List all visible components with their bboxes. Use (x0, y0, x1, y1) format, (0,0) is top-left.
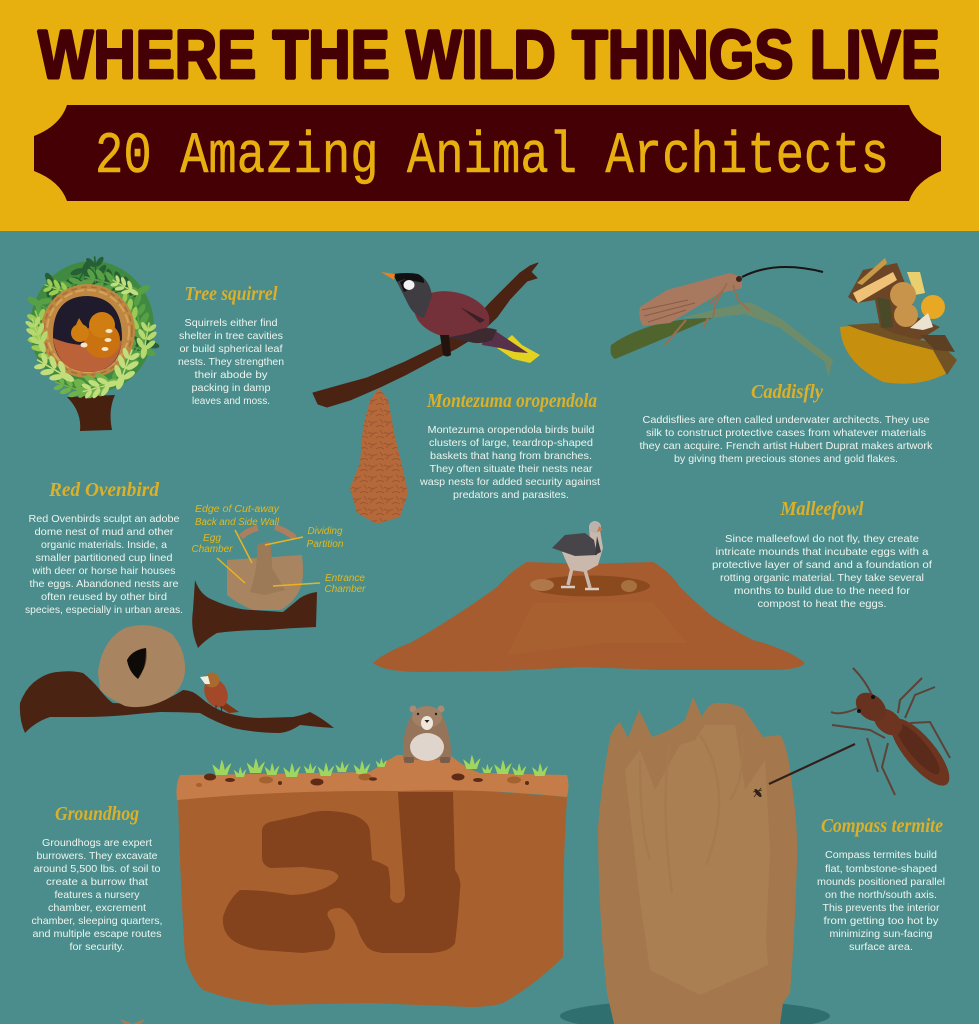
icon: malleefowl bird (552, 521, 603, 589)
text: groundhog: create a burrow that (46, 876, 148, 888)
heading: compass termite: Compass termite (821, 815, 943, 837)
panel: malleefowl (373, 498, 932, 672)
text: compass termite (817, 849, 945, 953)
labels: Chamber (192, 544, 233, 555)
heading: montezuma oropendola: Montezuma oropendola (426, 390, 597, 412)
text: caddisfly: they can acquire. French artist Hubert Duprat makes artwork (640, 440, 933, 452)
text: montezuma oropendola: baskets that hang from branches. (430, 450, 592, 462)
next section hint (121, 1020, 144, 1024)
text: red ovenbird: species, especially in urban areas. (25, 604, 183, 616)
text: groundhog: chamber, excrement (48, 902, 146, 914)
icon: leaf nest with squirrel (21, 254, 161, 431)
text: malleefowl: Since malleefowl do not fly, they create (725, 533, 919, 545)
text: montezuma oropendola: Montezuma oropendola birds build (428, 424, 595, 436)
text: groundhog: features a nursery (54, 889, 140, 901)
text: tree squirrel: or build spherical leaf (180, 343, 283, 355)
illustration: mound (373, 521, 805, 672)
text: red ovenbird: smaller partitioned cup lined (36, 552, 173, 564)
text: compass termite: mounds positioned parallel (817, 876, 945, 888)
panel: red ovenbird (20, 479, 366, 733)
text: tree squirrel: leaves and moss. (192, 395, 270, 407)
text: caddisfly: Caddisflies are often called underwater architects. They use (642, 414, 930, 426)
text: red ovenbird: the eggs. Abandoned nests are (30, 578, 179, 590)
text: tree squirrel (178, 317, 284, 407)
text: groundhog: for security. (70, 941, 124, 953)
illustration: termite mound (598, 697, 855, 1024)
text: montezuma oropendola: predators and parasites. (453, 489, 569, 501)
text: montezuma oropendola: wasp nests for added security against (419, 476, 600, 488)
text: groundhog: Groundhogs are expert (42, 837, 152, 849)
text: compass termite: on the north/south axis. (825, 889, 937, 901)
text: compass termite: Compass termites build (825, 849, 937, 861)
text: red ovenbird: organic materials. Inside, a (41, 539, 167, 551)
text: tree squirrel: nests. They strengthen (178, 356, 284, 368)
text: red ovenbird (25, 513, 183, 616)
labels: Partition (306, 539, 344, 550)
icon: caddisfly case (840, 258, 957, 384)
text: red ovenbird: Red Ovenbirds sculpt an adobe (28, 513, 180, 525)
diagram: cut-away nest (192, 504, 366, 648)
text: caddisfly (640, 414, 933, 465)
text: malleefowl: compost to heat the eggs. (758, 598, 886, 610)
heading: caddisfly: Caddisfly (751, 381, 823, 403)
text: montezuma oropendola (419, 424, 600, 501)
text: tree squirrel: Squirrels either find (184, 317, 278, 329)
labels: Entrance (325, 573, 365, 584)
text: red ovenbird: with deer or horse hair houses (31, 565, 176, 577)
text: tree squirrel: their abode by (194, 369, 268, 381)
subtitle banner (34, 105, 941, 201)
icon: red ovenbird (200, 672, 239, 714)
text: tree squirrel: packing in damp (192, 382, 271, 394)
text: compass termite: from getting too hot by (824, 915, 939, 927)
text: tree squirrel: shelter in tree cavities (179, 330, 283, 342)
labels: Edge of Cut-away (195, 504, 280, 515)
labels: Back and Side Wall (195, 517, 280, 528)
icon: caddisfly on leaf (610, 267, 833, 377)
heading: groundhog: Groundhog (55, 803, 139, 825)
text: compass termite: flat, tombstone-shaped (825, 863, 937, 875)
illustration: dome nest on branch (20, 625, 334, 733)
text: red ovenbird: often reused by other bird (41, 591, 167, 603)
basket nest (350, 388, 408, 524)
mound shadow (560, 1000, 830, 1024)
panel: caddisfly (610, 258, 957, 465)
icon: compass termite (831, 668, 958, 795)
labels (192, 504, 366, 595)
labels: Egg (203, 533, 221, 544)
text: malleefowl: intricate mounds that incubate eggs with a (716, 546, 929, 558)
branch (313, 263, 538, 407)
text: malleefowl: months to build due to the need for (734, 585, 911, 597)
text: red ovenbird: dome nest of mud and other (34, 526, 174, 538)
panel: tree squirrel (21, 254, 284, 431)
text: groundhog: chamber, sleeping quarters, (32, 915, 162, 927)
header band (0, 0, 979, 231)
small termite and pointer (753, 744, 855, 798)
text: groundhog: burrowers. They excavate (36, 850, 158, 862)
labels: Dividing (308, 526, 343, 537)
heading: red ovenbird: Red Ovenbird (48, 479, 160, 501)
grass (212, 755, 548, 777)
panel: groundhog (32, 706, 568, 1007)
heading: malleefowl: Malleefowl (780, 498, 864, 520)
text: malleefowl: rotting organic material. They take several (720, 572, 924, 584)
panel: montezuma oropendola (313, 263, 600, 524)
text: compass termite: surface area. (849, 941, 913, 953)
panel: compass termite (560, 668, 958, 1024)
text: compass termite: minimizing sun-facing (830, 928, 933, 940)
heading: tree squirrel: Tree squirrel (184, 283, 278, 305)
text: caddisfly: by giving them precious stones and gold flakes. (674, 453, 898, 465)
text: malleefowl: protective layer of sand and a foundation of (712, 559, 932, 571)
text: groundhog (32, 837, 162, 953)
stones (196, 774, 529, 787)
text: montezuma oropendola: clusters of large, teardrop-shaped (429, 437, 593, 449)
icon: oropendola bird (381, 272, 540, 363)
text: malleefowl (712, 533, 932, 610)
icon: groundhog (403, 706, 451, 763)
text: groundhog: and multiple escape routes (32, 928, 162, 940)
labels: Chamber (324, 584, 366, 595)
illustration: burrow (176, 706, 568, 1007)
text: compass termite: This prevents the interior (822, 902, 940, 914)
text: groundhog: around 5,500 lbs. of soil to (34, 863, 161, 875)
text: caddisfly: silk to construct protective cases from whatever materials (646, 427, 926, 439)
text: montezuma oropendola: They often situate their nests near (430, 463, 593, 475)
